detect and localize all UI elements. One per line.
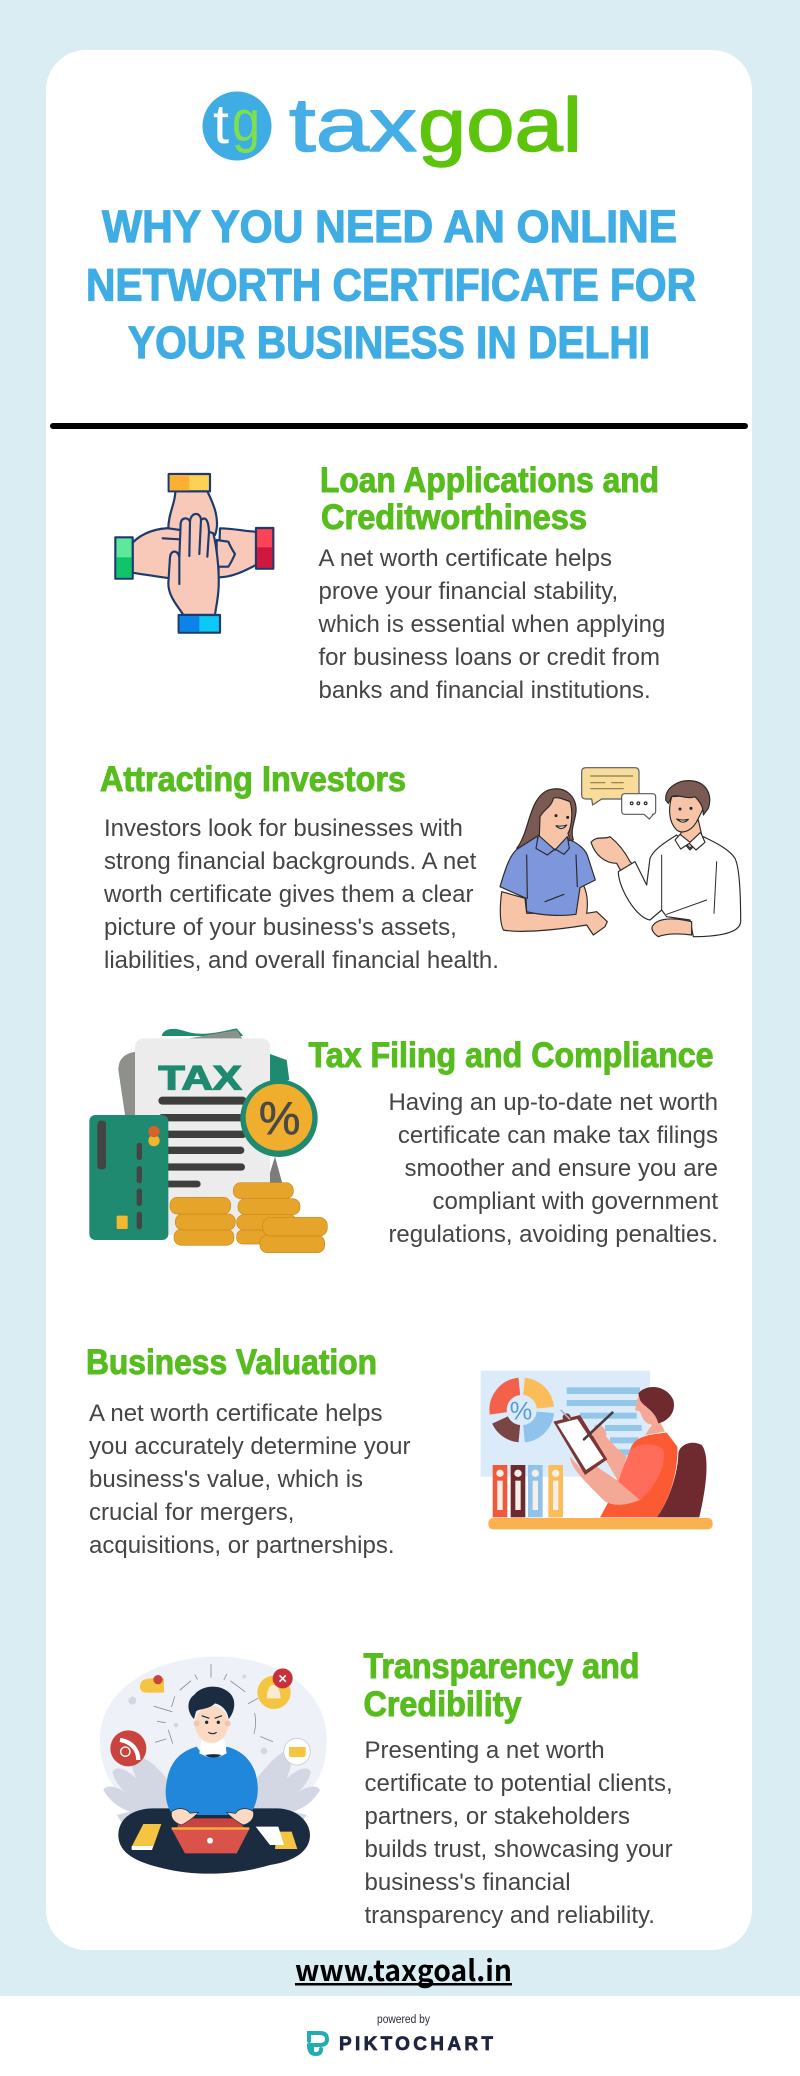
panel: transparency	[100, 1647, 673, 1929]
body text: builds trust, showcasing your	[364, 1836, 673, 1863]
icon: tax document, card and coins: TAX	[158, 1059, 242, 1097]
body text: for business loans or credit from	[318, 644, 660, 671]
title: WHY YOU NEED AN ONLINE	[102, 201, 677, 252]
body text: Presenting a net worth	[364, 1737, 605, 1764]
icon: stressed person at laptop with notifications	[100, 1657, 327, 1874]
icon: tax document, card and coins	[89, 1028, 327, 1253]
website link: www.taxgoal.in	[295, 1948, 512, 1990]
logo: taxgoal: g	[232, 89, 260, 154]
panel: business valuation	[86, 1343, 713, 1559]
body text: picture of your business's assets,	[104, 914, 457, 941]
body text: Investors look for businesses with	[104, 815, 463, 842]
panel: tax filing	[89, 1028, 718, 1253]
body text: strong financial backgrounds. A net	[104, 848, 477, 875]
heading: Tax Filing and Compliance	[308, 1036, 714, 1075]
icon: analyst with clipboard and pie chart: %	[510, 1397, 532, 1425]
body text: Having an up-to-date net worth	[388, 1089, 718, 1116]
logo: taxgoal: goal	[418, 83, 582, 168]
body text: certificate can make tax filings	[398, 1122, 718, 1149]
body text: partners, or stakeholders	[364, 1803, 630, 1830]
body text: you accurately determine your	[89, 1433, 410, 1460]
icon: stressed person at laptop with notifications: ×	[278, 1672, 287, 1688]
body text: banks and financial institutions.	[318, 677, 651, 704]
body text: regulations, avoiding penalties.	[388, 1221, 718, 1248]
logo: taxgoal: t	[213, 92, 229, 155]
body text	[89, 1400, 410, 1559]
body text: business's financial	[364, 1869, 571, 1896]
heading: Creditworthiness	[321, 498, 587, 537]
body text: liabilities, and overall financial health.	[104, 947, 499, 974]
heading	[320, 461, 659, 537]
heading: Loan Applications and	[320, 461, 659, 500]
body text	[318, 545, 665, 704]
body text: A net worth certificate helps	[318, 545, 612, 572]
heading: Business Valuation	[86, 1343, 377, 1382]
body text	[364, 1737, 673, 1929]
panel: attracting investors	[100, 760, 741, 974]
logo: taxgoal: tax	[289, 83, 417, 168]
panel: loan applications	[115, 461, 665, 704]
icon: two people talking	[500, 768, 741, 937]
body text: smoother and ensure you are	[404, 1155, 718, 1182]
footer: powered by piktochart: PIKTOCHART	[339, 2034, 493, 2055]
body text: A net worth certificate helps	[89, 1400, 382, 1427]
body text: worth certificate gives them a clear	[103, 881, 473, 908]
footer: powered by piktochart: powered by	[377, 2014, 430, 2026]
title	[86, 201, 696, 368]
heading: Attracting Investors	[100, 760, 406, 799]
body text: acquisitions, or partnerships.	[89, 1532, 394, 1559]
body text: prove your financial stability,	[318, 578, 618, 605]
body text: transparency and reliability.	[364, 1902, 655, 1929]
icon: tax document, card and coins: %	[259, 1092, 300, 1144]
title: NETWORTH CERTIFICATE FOR	[86, 260, 696, 310]
heading	[364, 1647, 640, 1724]
logo: taxgoal	[202, 83, 582, 168]
body text: certificate to potential clients,	[364, 1770, 673, 1797]
body text	[388, 1089, 718, 1248]
heading: Transparency and	[364, 1647, 640, 1686]
body text: business's value, which is	[89, 1466, 363, 1493]
body text: crucial for mergers,	[89, 1499, 294, 1526]
heading: Credibility	[364, 1685, 522, 1724]
footer: powered by piktochart	[0, 1996, 800, 2076]
icon: piktochart mark	[309, 2033, 327, 2054]
title: YOUR BUSINESS IN DELHI	[128, 317, 650, 368]
body text: which is essential when applying	[318, 611, 665, 638]
body text: compliant with government	[433, 1188, 718, 1215]
icon: four stacked hands	[115, 474, 273, 633]
icon: analyst with clipboard and pie chart	[481, 1371, 713, 1529]
body text	[103, 815, 499, 974]
